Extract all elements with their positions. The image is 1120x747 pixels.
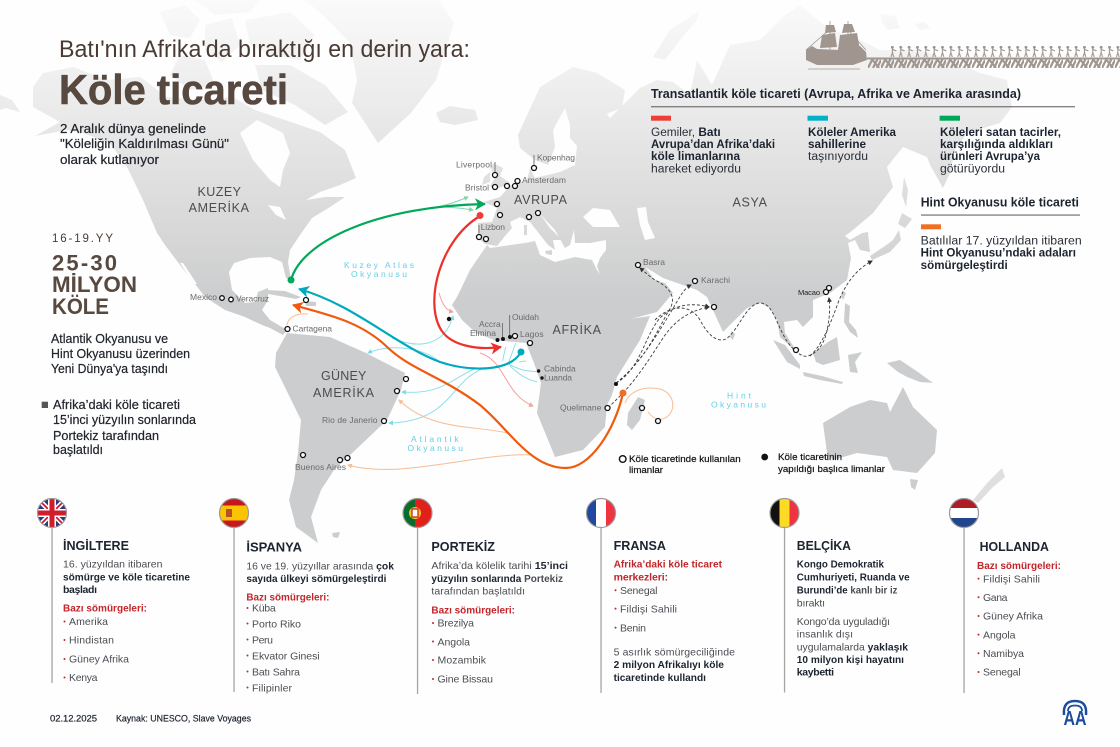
- legend: Indian Ocean trade: Batılılar 17. yüzyıldan itibaren: [921, 235, 1082, 247]
- green step: Köleleri satan tacirler,: [940, 127, 1061, 139]
- country: Spain: Bazı sömürgeleri:: [246, 592, 329, 604]
- green step: ürünleri Avrupa’ya: [940, 151, 1041, 163]
- port labels: Lizbon: [481, 222, 505, 232]
- big figure: KÖLE: [52, 294, 109, 319]
- Greenland: [304, 0, 454, 143]
- country: Belgium: kaybetti: [797, 667, 834, 679]
- country: Portugal: [402, 498, 568, 694]
- teal step: taşınıyordu: [808, 151, 868, 163]
- Australia: [823, 387, 937, 473]
- ocean labels: Okyanusu: [351, 269, 407, 279]
- country: Spain: sayıda ülkeyi sömürgeleştirdi: [246, 573, 386, 585]
- map legend: Köle ticaretinin: [778, 452, 842, 463]
- port labels: Luanda: [544, 373, 572, 383]
- subtitle: "Köleliğin Kaldırılması Günü": [60, 137, 229, 151]
- footer: date and source: 02.12.2025: [50, 714, 97, 725]
- description: Yeni Dünya'ya taşındı: [51, 362, 168, 376]
- country: Belgium: Cumhuriyeti, Ruanda ve: [797, 572, 910, 584]
- pier: [868, 58, 1120, 68]
- country: Spain: Ekvator Ginesi: [252, 650, 320, 662]
- country: England: Kenya: [69, 672, 98, 684]
- green step: karşılığında aldıkları: [940, 139, 1053, 151]
- country: Portugal: Bazı sömürgeleri:: [431, 604, 515, 616]
- red step: hareket ediyordu: [651, 164, 741, 176]
- Iceland: [436, 106, 478, 125]
- country: Belgium: 10 milyon kişi hayatını: [797, 654, 904, 666]
- thin route branches: [287, 197, 673, 469]
- country: Netherlands: HOLLANDA: [980, 540, 1049, 554]
- Java: [803, 372, 843, 384]
- ship: [806, 21, 867, 69]
- flag: Belgium: [770, 499, 798, 527]
- teal step: Köleler Amerika: [808, 127, 897, 139]
- flag: Spain: [220, 499, 248, 527]
- inland seas: [180, 120, 655, 284]
- country: France: 2 milyon Afrikalıyı köle: [614, 659, 724, 671]
- port labels: Karachi: [701, 275, 730, 285]
- country: Belgium: Kongo’da uyguladığı: [797, 616, 890, 628]
- country: England: Bazı sömürgeleri:: [63, 603, 147, 615]
- country: Belgium: insanlık dışı: [797, 629, 853, 641]
- Far west Chukotka: [0, 95, 20, 112]
- port labels: Amsterdam: [522, 175, 566, 185]
- port labels: Bristol: [465, 183, 489, 193]
- Africa: [452, 241, 650, 457]
- Black Sea: [583, 208, 620, 227]
- teal step: sahillerine: [808, 139, 866, 151]
- legend: transatlantic trade: [651, 86, 1075, 176]
- country: England: Hindistan: [69, 635, 114, 647]
- Falklands: [332, 532, 340, 538]
- title kicker: Batı'nın Afrika'da bıraktığı en derin yara:: [59, 36, 470, 63]
- country: Belgium: BELÇİKA: [797, 538, 851, 553]
- country: Belgium: Burundi’de kanlı bir iz: [797, 584, 898, 596]
- port labels: Kopenhag: [537, 153, 575, 163]
- main route arrows: [291, 204, 623, 468]
- note: 15’inci yüzyılın sonlarında: [53, 413, 196, 427]
- port labels: Liverpool: [456, 160, 492, 170]
- Madagascar: [627, 397, 645, 430]
- footer: date and source: [50, 714, 251, 725]
- country: France: merkezleri:: [614, 572, 668, 584]
- country: England: başladı: [63, 584, 97, 596]
- Novaya Zemlya: [653, 10, 700, 60]
- icon: AA logo: [1064, 701, 1086, 730]
- red step: köle limanlarına: [651, 151, 741, 163]
- Taiwan: [841, 291, 846, 300]
- country: Portugal: tarafından başlatıldı: [431, 586, 525, 598]
- port labels: Cartagena: [292, 324, 332, 334]
- country: Portugal: Brezilya: [438, 618, 474, 630]
- route start dots: [288, 212, 626, 396]
- green step: [940, 116, 1061, 176]
- teal route: [299, 289, 521, 369]
- legend: Indian Ocean trade: Hint Okyanusu’ndaki adaları: [921, 248, 1076, 260]
- port labels: Lagos: [520, 329, 544, 339]
- big figure: MİLYON: [52, 272, 137, 297]
- country: Netherlands: Fildişi Sahili: [983, 573, 1040, 585]
- legend: Indian Ocean trade: [921, 196, 1082, 272]
- country: England: Güney Afrika: [69, 654, 129, 666]
- ocean labels: Okyanusu: [408, 443, 463, 453]
- big figure: [52, 251, 137, 319]
- country: Spain: [219, 498, 394, 694]
- port labels: Ouidah: [512, 312, 539, 322]
- country: Spain: Porto Riko: [252, 618, 301, 630]
- ocean labels: Kuzey Atlas: [344, 260, 414, 270]
- continent labels: AVRUPA: [514, 193, 568, 207]
- Sri Lanka: [730, 331, 735, 340]
- country: England: sömürge ve köle ticaretine: [63, 572, 190, 584]
- title block: [59, 36, 470, 167]
- ocean labels: [344, 260, 766, 453]
- Siberian islands: [880, 14, 900, 30]
- continent labels: KUZEY: [198, 185, 242, 199]
- South America: [275, 333, 405, 543]
- North America: [33, 67, 356, 335]
- note: Afrika’daki köle ticareti: [53, 398, 180, 412]
- big figure: 25-30: [52, 251, 117, 276]
- left stats panel: [42, 233, 196, 457]
- legend: Indian Ocean trade: Hint Okyanusu köle ticareti: [921, 196, 1079, 210]
- Italy islands: [545, 250, 552, 255]
- ocean labels: Okyanusu: [711, 400, 766, 410]
- port labels: Elmina: [470, 328, 496, 338]
- world map: [0, 0, 1012, 543]
- legend: Indian Ocean trade: sömürgeleştirdi: [921, 260, 1008, 272]
- Tasmania: [910, 479, 918, 490]
- flag: UK: [38, 499, 66, 527]
- country: Portugal: Afrika’da kölelik tarihi 15’inci: [431, 560, 568, 572]
- Philippines: [844, 303, 858, 338]
- New Zealand: [973, 468, 1005, 503]
- port labels: Mexico: [190, 292, 217, 302]
- country: Belgium: [770, 498, 910, 692]
- map legend: yapıldığı başlıca limanlar: [778, 464, 885, 475]
- subtitle: olarak kutlanıyor: [60, 153, 159, 167]
- footer: date and source: Kaynak: UNESCO, Slave Voyages: [116, 714, 251, 725]
- New Guinea: [887, 360, 933, 383]
- subtitle: [60, 122, 229, 167]
- country: France: 5 asırlık sömürgeciliğinde: [614, 646, 735, 658]
- Cuba and Hispaniola: [266, 290, 301, 299]
- Borneo: [813, 337, 840, 365]
- Sulawesi: [848, 352, 862, 373]
- country: Netherlands: Namibya: [983, 648, 1024, 660]
- map legend: limanlar: [629, 465, 663, 476]
- continent labels: AMERİKA: [313, 386, 375, 400]
- continent labels: AMERİKA: [189, 201, 250, 215]
- country: Portugal: Gine Bissau: [438, 674, 493, 686]
- port labels: Rio de Janerio: [322, 415, 378, 425]
- country: Netherlands: Senegal: [983, 667, 1021, 679]
- Hudson Bay: [240, 120, 290, 187]
- description: [51, 332, 190, 376]
- continent labels: ASYA: [732, 196, 768, 210]
- port labels: Basra: [643, 257, 665, 267]
- Japan: [898, 213, 912, 228]
- country: France: Senegal: [620, 585, 658, 597]
- Caspian Sea: [637, 207, 655, 240]
- slave ports: filled dots: [447, 317, 618, 386]
- orange route: [293, 305, 623, 468]
- country: Belgium: Kongo Demokratik: [797, 558, 884, 570]
- country: Portugal: Mozambik: [438, 655, 487, 667]
- country: England: [37, 498, 190, 684]
- country: France: ticaretinde kullandı: [614, 672, 706, 684]
- country: France: Benin: [620, 622, 646, 634]
- country: Spain: Küba: [252, 603, 276, 615]
- note: Portekiz tarafından: [53, 429, 159, 443]
- country: Belgium: bıraktı: [797, 597, 825, 609]
- country: Spain: 16 ve 19. yüzyıllar arasında çok: [246, 560, 394, 572]
- country: Netherlands: [949, 498, 1061, 693]
- green route: [291, 204, 485, 280]
- note bullet: [42, 402, 48, 408]
- Great Lakes: [268, 205, 286, 220]
- port labels: Cabinda: [544, 364, 576, 374]
- country: Netherlands: Güney Afrika: [983, 611, 1043, 623]
- country: England: Amerika: [69, 616, 108, 628]
- slave ports: open circles: [220, 166, 831, 462]
- country: France: FRANSA: [614, 539, 666, 553]
- country: Spain: Peru: [252, 634, 273, 646]
- map legend: [619, 452, 885, 476]
- red step: Avrupa’dan Afrika’daki: [651, 139, 775, 151]
- subtitle: 2 Aralık dünya genelinde: [60, 122, 206, 136]
- flag: Netherlands: [951, 499, 977, 527]
- country: France: [586, 498, 735, 693]
- Indian Ocean dashed routes: [608, 261, 872, 408]
- country: Netherlands: Bazı sömürgeleri:: [977, 560, 1061, 572]
- ocean labels: Hint: [727, 391, 752, 401]
- country: Spain: İSPANYA: [246, 540, 302, 555]
- ship and slave line illustration: [806, 21, 1120, 69]
- country: England: İNGİLTERE: [63, 538, 129, 553]
- UK and Ireland: [490, 163, 510, 190]
- port labels: [190, 153, 820, 472]
- line of enslaved figures: [890, 46, 1120, 58]
- country: Portugal: PORTEKİZ: [431, 539, 495, 554]
- country: Netherlands: Angola: [983, 629, 1016, 641]
- port labels: Buenos Aires: [295, 462, 346, 472]
- red step: Gemiler, Batı: [651, 127, 721, 139]
- Gulf of California: [180, 263, 197, 284]
- country: Spain: Filipinler: [252, 682, 292, 694]
- country: England: 16. yüzyıldan itibaren: [63, 558, 163, 570]
- flag: France: [587, 500, 615, 526]
- country: Spain: Batı Sahra: [252, 666, 300, 678]
- continent labels: GÜNEY: [321, 369, 367, 383]
- red route: [434, 216, 501, 348]
- heading: Transatlantik köle ticareti (Avrupa, Afrika ve Amerika arasında): [651, 86, 1021, 101]
- port labels: Macao: [798, 288, 820, 297]
- port labels: Quelimane: [560, 403, 602, 413]
- icon: AA logo: AA: [1064, 708, 1086, 730]
- port labels: Veracruz: [236, 294, 269, 304]
- continent labels: AFRİKA: [552, 323, 602, 337]
- country: Portugal: Angola: [438, 636, 470, 648]
- port labels: Accra: [479, 319, 501, 329]
- note: [53, 398, 196, 457]
- description: Atlantik Okyanusu ve: [51, 332, 168, 346]
- teal step: [808, 116, 897, 163]
- Sakhalin: [902, 177, 908, 207]
- Sumatra: [773, 340, 800, 369]
- country: Belgium: uygulamalarda yaklaşık: [797, 641, 908, 653]
- description: Hint Okyanusu üzerinden: [51, 347, 190, 361]
- port ticks: [479, 155, 534, 338]
- red step: [651, 116, 775, 176]
- green step: götürüyordu: [940, 164, 1005, 176]
- flag: Portugal: [404, 499, 432, 527]
- note: başlatıldı: [53, 443, 103, 457]
- main title: Köle ticareti: [59, 66, 288, 113]
- period: 16-19.YY: [52, 233, 113, 245]
- continent labels: [189, 185, 768, 400]
- ocean labels: Atlantik: [411, 434, 459, 444]
- country: Netherlands: Gana: [983, 592, 1008, 604]
- Canadian Arctic islands: [160, 5, 200, 38]
- country: France: Fildişi Sahili: [620, 603, 677, 615]
- country: Portugal: yüzyılın sonlarında Portekiz: [431, 573, 563, 585]
- map legend: Köle ticaretinde kullanılan: [629, 454, 741, 465]
- country: France: Afrika’daki köle ticaret: [614, 558, 722, 570]
- Eurasia: [478, 5, 1012, 352]
